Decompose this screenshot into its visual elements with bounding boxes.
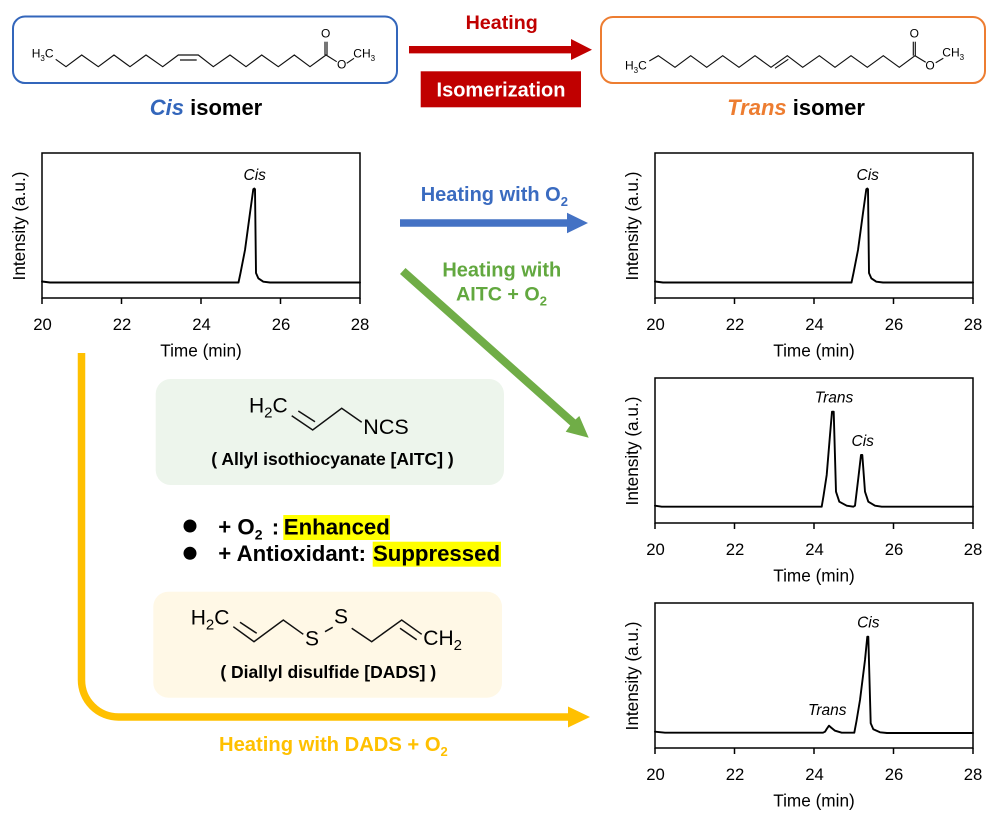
panel: trans isomer molecule: O (910, 27, 919, 41)
label: heating with oxygen: 2 (561, 194, 568, 209)
chart: initial cis chromatogram: Time (min) (160, 340, 242, 360)
panel: DADS: 2 (206, 616, 214, 633)
panel: DADS: 2 (454, 637, 462, 654)
chart: DADS chromatogram: 28 (964, 765, 982, 784)
text block: effects of oxygen and antioxidant: + Antioxidant: (218, 541, 366, 566)
chart: initial cis chromatogram: 24 (192, 315, 211, 334)
text block: effects of oxygen and antioxidant: Enhanced (284, 514, 390, 539)
text block: effects of oxygen and antioxidant: Suppressed (373, 541, 500, 566)
chart: heating with oxygen chromatogram: 20 (646, 315, 665, 334)
panel: trans isomer molecule (601, 17, 985, 83)
label: heating with AITC and oxygen: Heating with (442, 260, 561, 282)
chart: initial cis chromatogram: 26 (272, 315, 290, 334)
label: heating with DADS and oxygen: 2 (441, 744, 448, 759)
chart: AITC chromatogram: 28 (964, 540, 982, 559)
panel: DADS: H (191, 606, 206, 629)
panel: trans isomer molecule: O (925, 58, 935, 72)
chart: heating with oxygen chromatogram (622, 153, 982, 360)
panel: trans isomer molecule: CH (942, 46, 960, 60)
panel: trans isomer molecule: H (625, 58, 634, 72)
panel: DADS: S (334, 605, 348, 628)
chart: DADS chromatogram: Time (min) (773, 790, 855, 810)
panel: AITC: NCS (363, 415, 409, 439)
arrow: heating with DADS (82, 353, 590, 728)
chart: AITC chromatogram: 24 (805, 540, 824, 559)
chart: DADS chromatogram: Cis (857, 614, 880, 631)
text block: effects of oxygen and antioxidant: : (272, 514, 279, 539)
chart: initial cis chromatogram (9, 153, 369, 360)
chart: AITC chromatogram: Intensity (a.u.) (622, 397, 642, 505)
chart: initial cis chromatogram: 20 (33, 315, 52, 334)
chart: AITC chromatogram: 20 (646, 540, 665, 559)
label: isomerization box (421, 71, 581, 107)
chart: DADS chromatogram: 22 (726, 765, 744, 784)
chart: heating with oxygen chromatogram: 24 (805, 315, 824, 334)
heading: trans isomer: Trans isomer (727, 95, 865, 120)
label: heating: Heating (466, 12, 538, 34)
label: heating with DADS and oxygen: Heating with DADS + O (219, 734, 441, 756)
chart: initial cis chromatogram: Intensity (a.u.) (9, 172, 29, 280)
label: heating with oxygen: Heating with O (421, 184, 561, 206)
panel: AITC: H (249, 394, 264, 417)
chart: heating with oxygen chromatogram: 22 (726, 315, 744, 334)
panel: cis isomer molecule: H (32, 46, 40, 60)
panel: trans isomer molecule: 3 (960, 53, 965, 62)
chart: heating with oxygen chromatogram: Time (min) (773, 340, 855, 360)
text block: effects of oxygen and antioxidant (184, 514, 501, 567)
chart: DADS chromatogram: Intensity (a.u.) (622, 622, 642, 730)
panel: cis isomer molecule: 3 (371, 54, 376, 63)
panel: cis isomer molecule: O (337, 57, 346, 71)
panel: cis isomer molecule: CH (353, 46, 371, 60)
chart: DADS chromatogram: Trans (808, 702, 847, 719)
text block: effects of oxygen and antioxidant: 2 (255, 526, 263, 542)
panel: AITC: 2 (264, 404, 273, 421)
panel: DADS (153, 592, 502, 698)
chart: initial cis chromatogram: 28 (351, 315, 369, 334)
chart: AITC chromatogram: 26 (885, 540, 903, 559)
chart: DADS chromatogram: 24 (805, 765, 824, 784)
panel: AITC (156, 379, 504, 485)
chart: heating with oxygen chromatogram: 26 (885, 315, 903, 334)
chart: DADS chromatogram: 26 (885, 765, 903, 784)
heading: cis isomer: Cis isomer (150, 95, 263, 120)
chart: AITC chromatogram: Time (min) (773, 566, 855, 586)
chart: AITC chromatogram (622, 378, 982, 586)
panel: DADS: ( Diallyl disulfide [DADS] ) (220, 662, 436, 682)
panel: trans isomer molecule: 3 (634, 66, 639, 75)
arrow: heating with AITC (400, 268, 589, 438)
panel: cis isomer molecule: 3 (40, 54, 45, 63)
label: heating with AITC and oxygen: 2 (540, 294, 547, 309)
text block: effects of oxygen and antioxidant: + O (218, 514, 255, 539)
panel: AITC: C (273, 394, 288, 417)
panel: trans isomer molecule: C (638, 58, 647, 72)
chart: initial cis chromatogram: 22 (113, 315, 131, 334)
chart: heating with oxygen chromatogram: Intensity (a.u.) (622, 172, 642, 280)
label: isomerization box: Isomerization (437, 80, 565, 102)
arrow: heating (409, 39, 592, 60)
chart: AITC chromatogram: 22 (726, 540, 744, 559)
arrow: heating with oxygen (400, 213, 588, 233)
chart: heating with oxygen chromatogram: 28 (964, 315, 982, 334)
panel: DADS: C (214, 606, 229, 629)
panel: cis isomer molecule: O (321, 26, 330, 40)
panel: DADS: S (305, 628, 319, 651)
label: heating with AITC and oxygen: AITC + O (456, 284, 540, 306)
chart: DADS chromatogram: 20 (646, 765, 665, 784)
chart: AITC chromatogram: Cis (852, 433, 874, 450)
panel: cis isomer molecule: C (45, 46, 54, 60)
panel: AITC: ( Allyl isothiocyanate [AITC] ) (211, 449, 454, 469)
panel: DADS: CH (423, 627, 454, 650)
chart: initial cis chromatogram: Cis (244, 167, 266, 184)
chart: heating with oxygen chromatogram: Cis (857, 167, 879, 184)
panel: cis isomer molecule (13, 16, 397, 83)
chart: AITC chromatogram: Trans (815, 390, 853, 406)
chart: DADS chromatogram (622, 603, 982, 810)
label: heating with AITC and oxygen (442, 260, 561, 309)
